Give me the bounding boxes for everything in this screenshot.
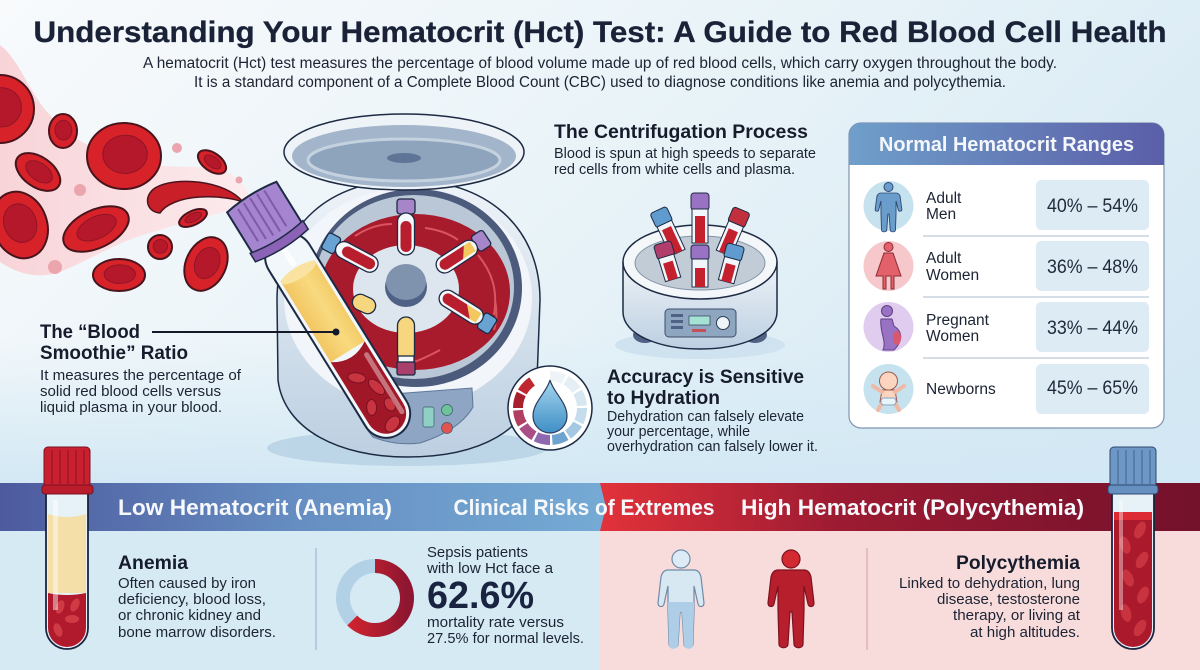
text: polycythemia: Linked to dehydration, lung bbox=[899, 575, 1080, 592]
text: the centrifugation process bbox=[554, 122, 816, 178]
text: polycythemia: at high altitudes. bbox=[970, 624, 1080, 641]
band: clinical risks heading: Clinical Risks of Extremes bbox=[454, 495, 714, 520]
text: anemia: or chronic kidney and bbox=[118, 607, 261, 624]
illustration: low hematocrit tube bbox=[42, 447, 93, 649]
callout line bbox=[152, 328, 340, 336]
text: anemia: Often caused by iron bbox=[118, 575, 256, 592]
centrifuge lid bbox=[284, 114, 524, 190]
text: accuracy is sensitive to hydration: your percentage, while bbox=[607, 423, 750, 440]
intro text: It is a standard component of a Complete Blood Count (CBC) used to diagnose conditions like anemia and polycythemia. bbox=[194, 74, 1006, 91]
row: pregnant women: 33% – 44% bbox=[1047, 317, 1138, 339]
text: the centrifugation process: Blood is spun at high speeds to separate bbox=[554, 145, 816, 162]
row: adult women bbox=[864, 241, 1149, 291]
band: high hematocrit bbox=[600, 483, 1200, 531]
stat: sepsis mortality: 27.5% for normal levels. bbox=[427, 630, 584, 647]
text: anemia: Anemia bbox=[118, 553, 188, 574]
text: anemia bbox=[118, 553, 276, 641]
row: adult women: Women bbox=[926, 267, 979, 284]
chart: mortality donut bbox=[343, 566, 407, 630]
text: polycythemia bbox=[899, 553, 1081, 641]
intro text: A hematocrit (Hct) test measures the percentage of blood volume made up of red blood cells, which carry oxygen throughout the body. bbox=[143, 55, 1057, 72]
row: newborns: 45% – 65% bbox=[1047, 377, 1138, 399]
row: pregnant women bbox=[864, 302, 1149, 352]
illustration: red blood cell stream bbox=[0, 45, 250, 298]
icon: person with high red cell volume bbox=[768, 550, 814, 648]
text: polycythemia: disease, testosterone bbox=[937, 591, 1080, 608]
rotor hub knob bbox=[385, 264, 427, 307]
stat: sepsis mortality bbox=[426, 544, 584, 647]
callout: blood smoothie ratio bbox=[40, 322, 242, 416]
band: low hematocrit bbox=[0, 483, 600, 531]
text: anemia: bone marrow disorders. bbox=[118, 624, 276, 641]
stat: sepsis mortality: Sepsis patients bbox=[427, 544, 528, 561]
row: adult women: 36% – 48% bbox=[1047, 256, 1138, 278]
text: accuracy is sensitive to hydration: Dehydration can falsely elevate bbox=[607, 408, 804, 425]
text: the centrifugation process: red cells from white cells and plasma. bbox=[554, 161, 795, 178]
illustration: high hematocrit tube bbox=[1108, 447, 1158, 649]
row: pregnant women: Women bbox=[926, 328, 979, 345]
panel header bbox=[849, 123, 1164, 165]
row: newborns: Newborns bbox=[926, 381, 996, 398]
row: adult women: Adult bbox=[926, 250, 962, 267]
panel: high hematocrit lower background bbox=[600, 531, 1200, 670]
stat: sepsis mortality: mortality rate versus bbox=[427, 614, 564, 631]
control panel bbox=[665, 309, 736, 337]
callout: blood smoothie ratio: The “Blood bbox=[40, 322, 140, 343]
callout: blood smoothie ratio: It measures the percentage of bbox=[40, 367, 242, 384]
callout: blood smoothie ratio: Smoothie” Ratio bbox=[40, 343, 188, 364]
row: adult men: Adult bbox=[926, 190, 962, 207]
row: newborns bbox=[864, 364, 1149, 414]
title: Understanding Your Hematocrit (Hct) Test: A Guide to Red Blood Cell Health bbox=[34, 16, 1166, 49]
text: the centrifugation process: The Centrifugation Process bbox=[554, 122, 808, 143]
stat: sepsis mortality: 62.6% bbox=[427, 575, 534, 617]
text: accuracy is sensitive to hydration: overhydration can falsely lower it. bbox=[607, 438, 818, 455]
panel: low hematocrit lower background bbox=[0, 531, 600, 670]
large test tube bbox=[224, 179, 425, 451]
text: polycythemia: Polycythemia bbox=[956, 553, 1080, 574]
panel: normal hematocrit ranges bbox=[849, 123, 1164, 428]
row: adult men bbox=[864, 180, 1149, 232]
illustration: benchtop centrifuge with tubes bbox=[615, 193, 785, 359]
text: accuracy is sensitive to hydration bbox=[607, 367, 818, 455]
control panel bbox=[352, 388, 473, 444]
illustration: large centrifuge bbox=[152, 114, 547, 466]
row: pregnant women: Pregnant bbox=[926, 312, 990, 329]
callout: blood smoothie ratio: solid red blood cells versus bbox=[40, 383, 221, 400]
icon: person with low red cell volume bbox=[658, 550, 704, 649]
band: low hematocrit: Low Hematocrit (Anemia) bbox=[118, 495, 392, 520]
text: anemia: deficiency, blood loss, bbox=[118, 591, 266, 608]
text: polycythemia: therapy, or living at bbox=[953, 607, 1081, 624]
rotor tubes bbox=[321, 199, 498, 375]
text: accuracy is sensitive to hydration: to Hydration bbox=[607, 388, 720, 409]
text: accuracy is sensitive to hydration: Accuracy is Sensitive bbox=[607, 367, 804, 388]
callout: blood smoothie ratio: liquid plasma in your blood. bbox=[40, 399, 222, 416]
intro text bbox=[143, 55, 1057, 91]
icon: hydration dial bbox=[506, 364, 594, 452]
row: adult men: 40% – 54% bbox=[1047, 195, 1138, 217]
row: adult men: Men bbox=[926, 206, 956, 223]
band: high hematocrit: High Hematocrit (Polycythemia) bbox=[741, 495, 1084, 520]
panel header: Normal Hematocrit Ranges bbox=[879, 133, 1134, 156]
stat: sepsis mortality: with low Hct face a bbox=[426, 560, 554, 577]
